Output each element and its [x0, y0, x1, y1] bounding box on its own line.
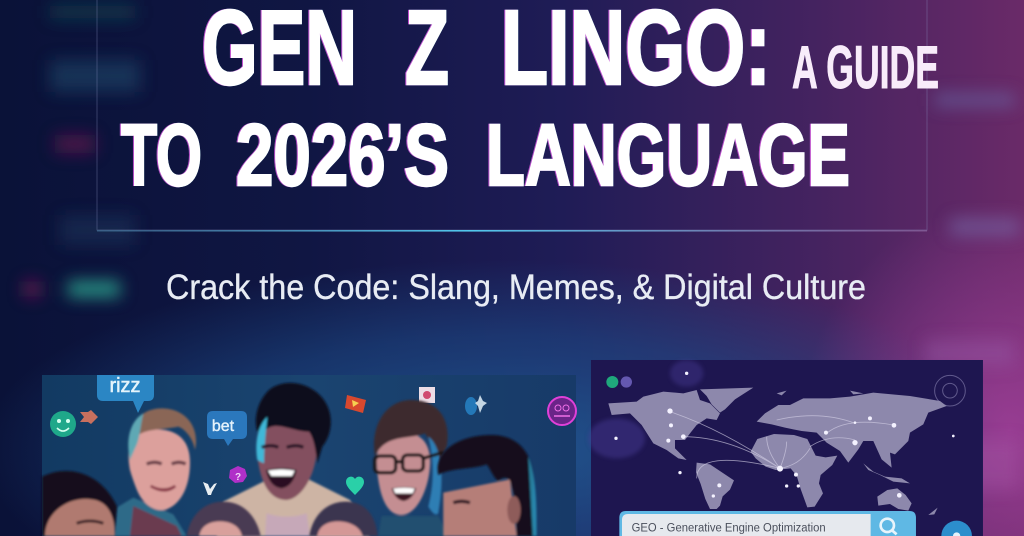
person: man with glasses [374, 400, 448, 536]
icon: magnifying glass [881, 519, 897, 534]
speech bubble: rizz: rizz [109, 375, 141, 397]
title frame [97, 0, 927, 232]
icon: blue round button [941, 521, 972, 536]
title: line two: LANGUAGE [486, 107, 850, 204]
speech bubble: bet [207, 411, 247, 446]
icon: purple emoji [548, 397, 576, 425]
speech bubble: bet: bet [212, 418, 235, 435]
person: blond man [115, 408, 196, 536]
map nodes [614, 372, 955, 498]
panel: group of friends [42, 375, 576, 536]
person: woman, centre left [187, 502, 261, 536]
icon: arrow [80, 410, 98, 424]
icon: purple question badge: ? [235, 472, 241, 483]
subtitle: Crack the Code: Slang, Memes, & Digital Culture [166, 268, 866, 307]
icon: white square [419, 387, 435, 403]
person: woman, left [42, 471, 117, 536]
icon: green heart [346, 477, 364, 495]
search bar: GEO - Generative Engine Optimization [632, 520, 826, 534]
continents [608, 388, 947, 515]
connection arcs [670, 412, 893, 478]
title: line two [121, 107, 850, 204]
panel: world map [588, 360, 983, 536]
icon: green smiley [50, 411, 76, 437]
person: man in the middle [217, 383, 370, 536]
search bar [619, 511, 916, 536]
icon: video play [345, 395, 366, 413]
person: woman, centre right [309, 502, 378, 536]
title: line two: TO [121, 107, 202, 204]
icon: purple question badge [229, 466, 247, 483]
icon: rocket [465, 395, 487, 415]
title: line one [202, 0, 771, 107]
title: line two: 2026’S [236, 107, 449, 204]
person: dark-haired man, right [438, 435, 537, 536]
speech bubble: rizz [97, 375, 154, 413]
icon: white tick [203, 482, 217, 495]
icon: radar swirl [935, 375, 965, 406]
status dots [606, 376, 632, 388]
